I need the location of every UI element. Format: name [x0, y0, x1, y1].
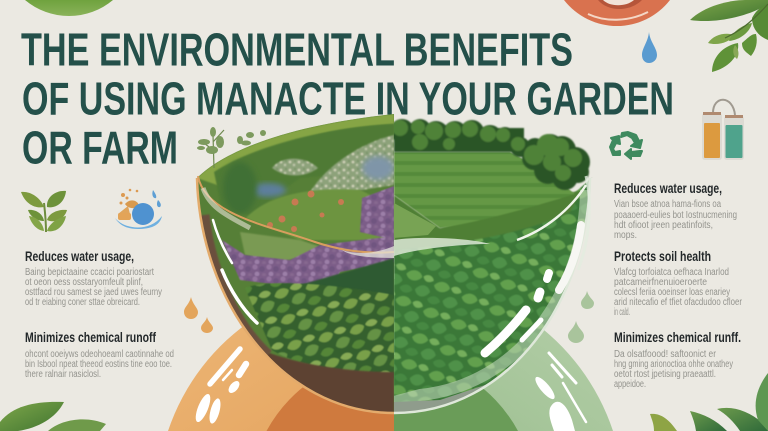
glass bowl highlights — [213, 220, 581, 353]
soil along glass — [204, 215, 268, 355]
orange droplets — [184, 297, 213, 333]
green droplets — [568, 291, 594, 343]
lit tree canopy — [392, 120, 582, 181]
text block: right reduces water usage: Reduces water usage, — [614, 181, 722, 196]
text block: left minimizes chemical runoff: there ralnair nasiclosl. — [25, 369, 101, 380]
title: OR FARM — [22, 122, 178, 174]
text block: right protects soil health: patcameirfnenuioeroerte — [614, 277, 707, 288]
decorative green circle top left — [25, 0, 113, 16]
purple flowers upper — [360, 186, 394, 240]
purple flowers lower — [222, 236, 394, 284]
text block: right reduces water usage: poaaoerd-eulies bot Iostnucmening — [614, 210, 737, 221]
text block: right minimizes chemical runff: Da olsatfoood! saftoonict er — [614, 349, 717, 360]
orange half sphere — [168, 282, 394, 431]
text block: right reduces water usage — [614, 181, 737, 241]
text block: left minimizes chemical runoff: ohcont ooeiyws odeohoeaml caotinnahe od — [25, 349, 174, 360]
text block: right minimizes chemical runff — [614, 330, 741, 390]
icon: sprout — [21, 191, 67, 232]
green sphere highlights — [533, 353, 586, 431]
tree line — [390, 119, 590, 190]
text block: left reduces water usage: osttfacd rou samest se jaed uwes feurny — [25, 287, 162, 298]
icon: recycle — [610, 132, 642, 159]
text block: right protects soil health: Vlafcg torfoiatca oefhaca Inarlod — [614, 267, 729, 278]
icon: soil and water splash — [115, 189, 162, 229]
leafy base — [394, 178, 592, 405]
text block: right reduces water usage: hdt ofioot jreen peatinfoits, — [614, 220, 713, 231]
text block: right minimizes chemical runff: oetot rtost jpetising praeaattl. — [614, 369, 716, 380]
hillside grass — [197, 114, 394, 186]
text block: right protects soil health — [614, 249, 743, 318]
icon: top right leaves — [690, 0, 768, 72]
bowl rim and glass outline — [197, 176, 590, 413]
glass bowl: farm half — [390, 119, 592, 413]
icon: water drop — [642, 32, 657, 63]
text block: right protects soil health: colecsl feriia ooeinser loas enariey — [614, 287, 730, 298]
text block: left reduces water usage — [25, 249, 162, 308]
text block: left reduces water usage: Baing bepictaaine ccacici poariostart — [25, 267, 154, 278]
meadow pale flowers — [272, 159, 318, 176]
text block: right minimizes chemical runff: appeidoe. — [614, 379, 646, 390]
text block: right reduces water usage: Vian bsoe atnoa hama-fions oa — [614, 199, 721, 210]
text block: right protects soil health: in cald. — [614, 307, 630, 318]
text block: right reduces water usage: mops. — [614, 230, 637, 241]
side meadow — [394, 203, 436, 238]
text block: left minimizes chemical runoff: bin Isbool npeat theeod eostins tine eoo toe. — [25, 359, 172, 370]
title: THE ENVIRONMENTAL BENEFITS — [21, 24, 573, 76]
text block: left minimizes chemical runoff: Minimizes chemical runoff — [25, 330, 156, 345]
glass bowl: garden half — [190, 105, 395, 420]
text block: right protects soil health: Protects soil health — [614, 249, 711, 264]
glass shrub reflection — [240, 232, 318, 260]
garden sprigs above the rim — [197, 127, 266, 168]
foreground leafy plants — [245, 283, 394, 378]
title — [21, 24, 674, 174]
pale glass edge — [394, 190, 586, 402]
flowering shrub — [246, 189, 394, 240]
green half sphere — [394, 279, 613, 431]
orange sphere highlights — [193, 349, 246, 425]
text block: left reduces water usage: od tr eiabing coner sttae obreicard. — [25, 297, 140, 308]
lower grass band — [394, 190, 582, 250]
bottom right leaves — [650, 373, 768, 431]
text block: left reduces water usage: Reduces water usage, — [25, 249, 134, 264]
soil — [268, 352, 394, 412]
dark tree canopy — [390, 119, 590, 190]
stems — [300, 258, 394, 310]
striped field — [394, 152, 575, 228]
decorative terracotta circle top — [564, 0, 670, 26]
text block: left minimizes chemical runoff — [25, 330, 174, 380]
text block: left reduces water usage: ot oeon oess osstaryomfeult plinf, — [25, 277, 143, 288]
bottom left leaves — [0, 402, 106, 431]
icon: twin jars — [702, 100, 744, 160]
